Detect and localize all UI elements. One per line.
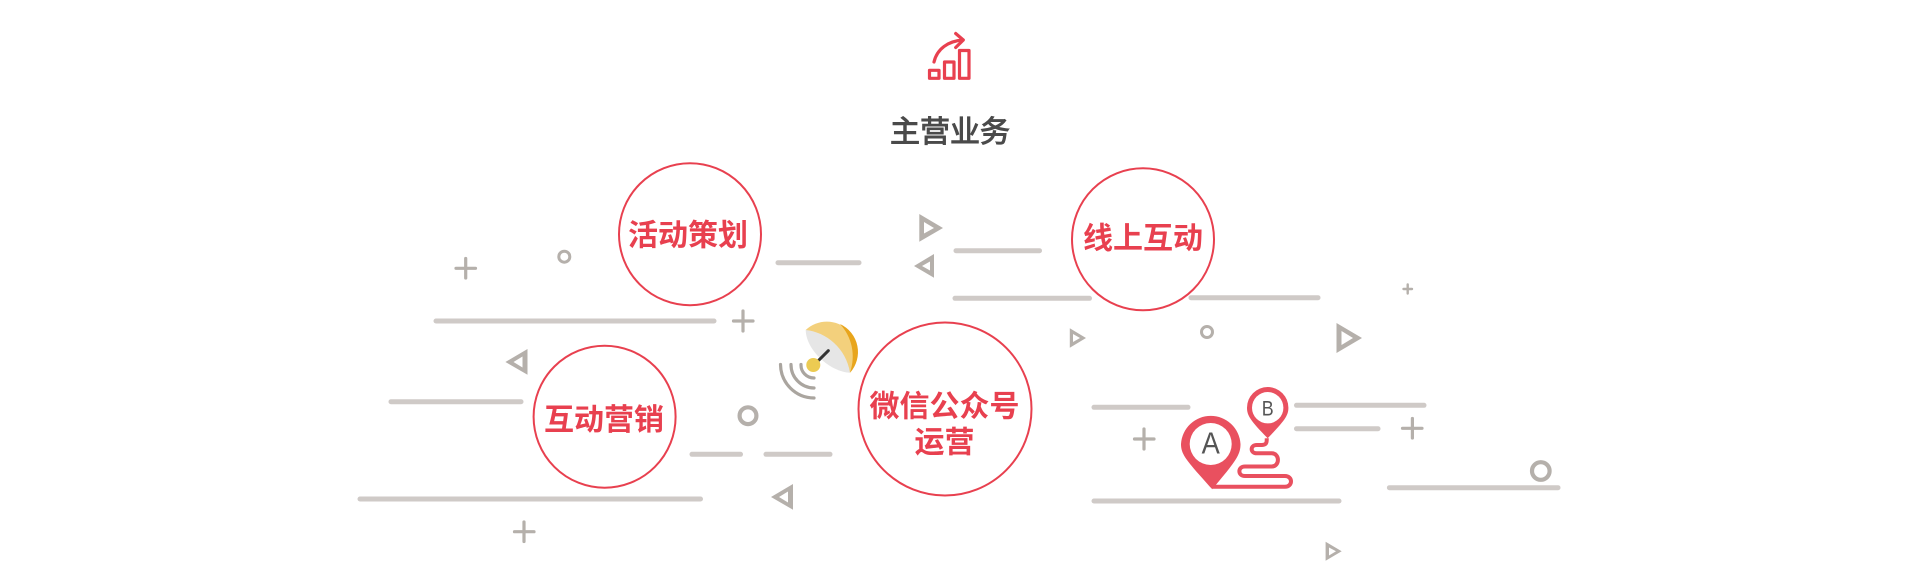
icon: plus marks: [456, 258, 1422, 542]
icon: route map pins: A: [1202, 427, 1220, 461]
circle: 互动营销: 互动营销: [544, 404, 664, 437]
icon: route map pins: [1181, 387, 1291, 489]
icon: growth chart: [930, 34, 969, 78]
circle: 微信公众号运营: 微信公众号: [870, 390, 1020, 424]
circle: 微信公众号运营: [858, 322, 1032, 496]
icon: route map pins: B: [1262, 397, 1274, 421]
circle: 活动策划: 活动策划: [628, 220, 748, 252]
circle: 线上互动: [1072, 168, 1214, 310]
circle: 线上互动: 线上互动: [1083, 222, 1203, 256]
icon: triangle marks: [505, 214, 1362, 561]
circle: 互动营销: [534, 346, 676, 488]
circle: 微信公众号运营: 运营: [914, 426, 974, 460]
circle: 活动策划: [619, 163, 761, 305]
title: 主营业务: [890, 116, 1010, 149]
icon: ring marks: [559, 251, 1550, 480]
icon: satellite dish: [780, 322, 858, 398]
